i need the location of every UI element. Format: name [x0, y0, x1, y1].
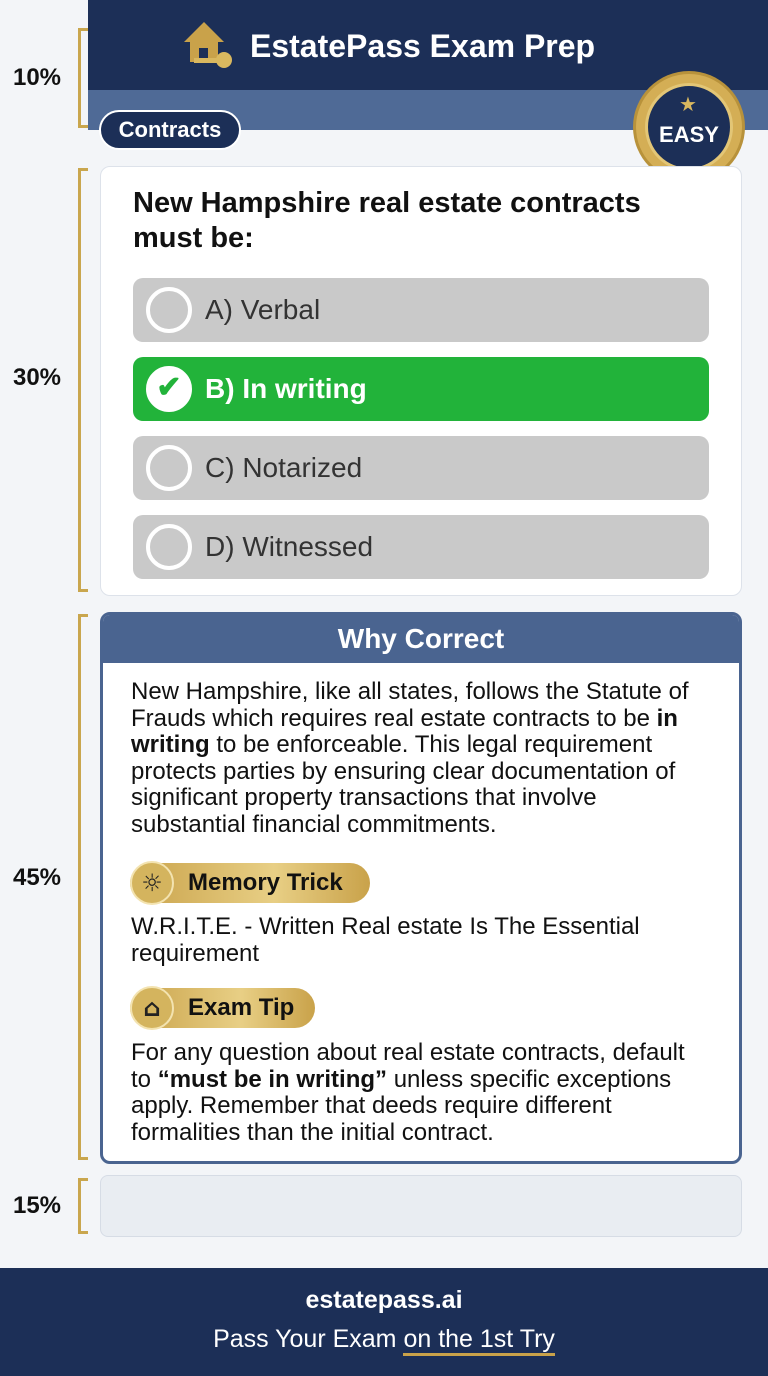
memory trick pill: Memory Trick: [188, 869, 343, 896]
option B correct: [133, 357, 709, 421]
option C: C) Notarized: [205, 452, 362, 483]
exam tip text: For any question about real estate contracts, default to “must be in writing” unless specific exceptions apply. Remember that deeds require different formalities than the initial contract.: [131, 1039, 685, 1146]
bracket labels: [13, 28, 88, 1234]
option A: A) Verbal: [205, 294, 320, 325]
footer: estatepass.ai: [305, 1286, 463, 1314]
bracket labels: 15%: [13, 1192, 61, 1219]
exam tip pill: ⌂: [143, 994, 161, 1022]
explanation text: New Hampshire, like all states, follows the Statute of Frauds which requires real estate contracts to be in writing to be enforceable. This legal requirement protects parties by ensuring clear documentation of significant property transactions that involve substantial financial commitments.: [131, 678, 689, 838]
footer: Pass Your Exam on the 1st Try: [213, 1325, 555, 1353]
option D: D) Witnessed: [205, 531, 373, 562]
option B correct: ✔: [156, 371, 182, 404]
badge: EASY: ★: [679, 94, 697, 116]
title: EstatePass Exam Prep: [250, 28, 595, 64]
category pill: Contracts: [119, 117, 221, 142]
option B correct: B) In writing: [205, 373, 367, 404]
option D: [133, 515, 709, 579]
bracket labels: 45%: [13, 864, 61, 891]
panel: why correct: [100, 612, 742, 1164]
badge: EASY: [636, 74, 742, 180]
bracket labels: 10%: [13, 64, 61, 91]
heading: Why Correct: [338, 623, 504, 654]
badge: EASY: EASY: [659, 122, 719, 147]
bracket labels: 30%: [13, 364, 61, 391]
question text: New Hampshire real estate contracts must be:: [133, 187, 641, 254]
memory trick pill: [130, 863, 370, 903]
option A: [133, 278, 709, 342]
category pill: [99, 110, 241, 150]
memory trick text: W.R.I.T.E. - Written Real estate Is The Essential requirement: [131, 913, 640, 966]
empty box: [100, 1175, 742, 1237]
footer: [0, 1268, 768, 1376]
memory trick pill: ☼: [141, 869, 163, 897]
exam tip pill: Exam Tip: [188, 994, 294, 1021]
panel: question: [100, 166, 742, 596]
header: [88, 0, 768, 130]
icon: house key: [184, 22, 232, 68]
exam tip pill: [130, 988, 315, 1028]
option C: [133, 436, 709, 500]
heading: [103, 615, 739, 663]
